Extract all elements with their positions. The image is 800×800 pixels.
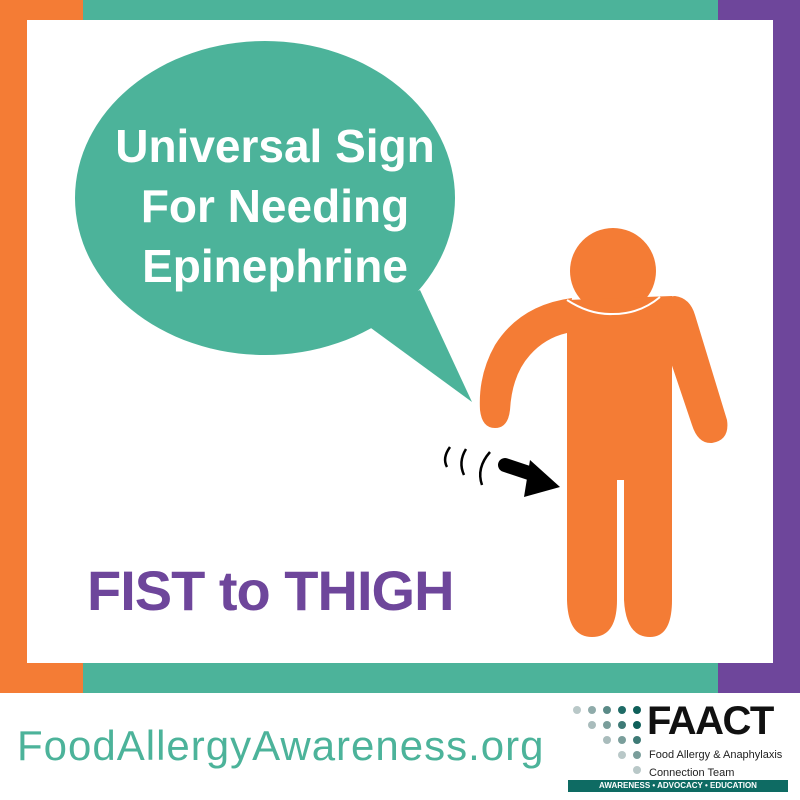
logo: AWARENESS • ADVOCACY • EDUCATION: [599, 781, 757, 790]
title: [115, 120, 435, 292]
speech bubble: [75, 41, 472, 402]
logo: Food Allergy & Anaphylaxis: [649, 749, 782, 761]
slogan: FIST to THIGH: [87, 559, 454, 622]
title: Epinephrine: [142, 240, 408, 292]
title: Universal Sign: [115, 120, 435, 172]
person: [480, 228, 727, 637]
logo: Connection Team: [649, 767, 734, 779]
logo: FAACT: [647, 699, 773, 743]
website: FoodAllergyAwareness.org: [17, 722, 544, 769]
arrow: [445, 447, 560, 497]
logo: [568, 699, 788, 792]
title: For Needing: [141, 180, 409, 232]
